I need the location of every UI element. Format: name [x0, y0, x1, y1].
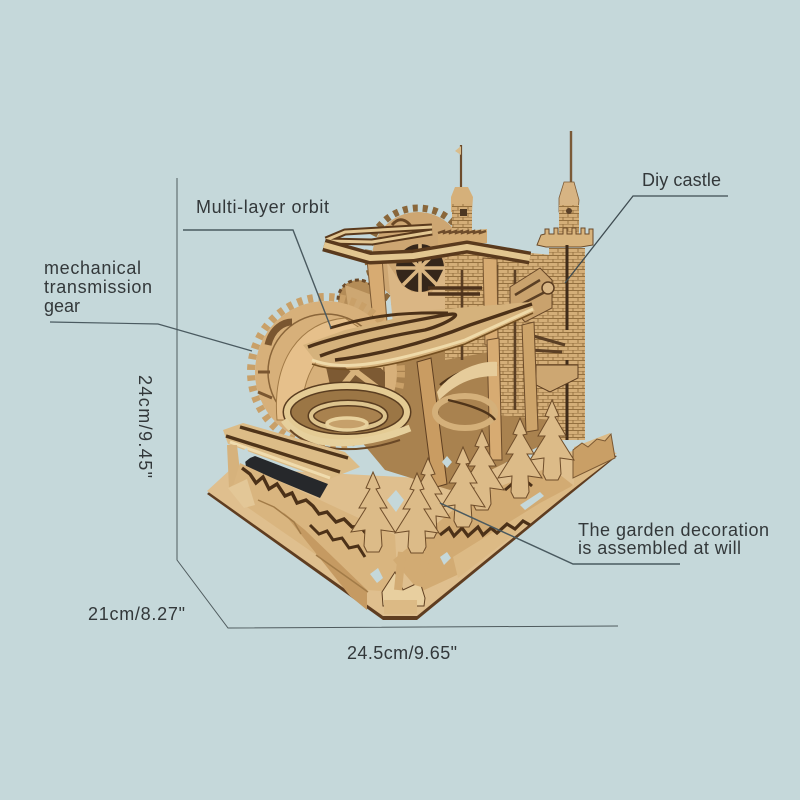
right spiral and arch gear [435, 362, 497, 428]
left fence [228, 463, 398, 610]
spiral track [284, 386, 410, 449]
upper right gear mechanism [510, 268, 554, 322]
label: garden decoration: The garden decoration [578, 520, 769, 540]
dimension line [177, 178, 618, 628]
leader: multi-layer orbit [183, 230, 331, 328]
lower track [223, 423, 360, 488]
battery box [245, 456, 328, 498]
label: mechanical transmission gear: mechanical [44, 258, 141, 278]
leader: garden decoration [440, 503, 680, 564]
central backdrop [360, 300, 552, 490]
left castle tower [438, 145, 487, 246]
label: mechanical transmission gear: transmission [44, 277, 152, 297]
label: width dimension: 24.5cm/9.65" [347, 643, 457, 663]
leader: mechanical transmission gear [50, 322, 252, 351]
wooden marble run castle model [207, 131, 617, 620]
top track [324, 227, 530, 258]
small side gear [338, 280, 378, 320]
middle track [303, 302, 535, 369]
timber pillars [367, 258, 538, 488]
label: garden decoration: is assembled at will [578, 538, 741, 558]
label: multi-layer orbit: Multi-layer orbit [196, 197, 329, 217]
back gear [368, 208, 468, 345]
label: garden decoration [578, 520, 769, 558]
large transmission gear [251, 297, 401, 447]
leader: diy castle [565, 196, 728, 283]
back castle wall [428, 245, 552, 420]
label: height dimension: 24cm/9.45" [135, 375, 155, 478]
gaps showing background [240, 448, 544, 583]
right fence [393, 433, 615, 592]
base board [207, 448, 617, 620]
label: diy castle: Diy castle [642, 170, 721, 190]
right castle tower [530, 131, 593, 440]
label: mechanical transmission gear [44, 258, 152, 316]
pine trees [351, 400, 574, 553]
label: mechanical transmission gear: gear [44, 296, 80, 316]
front corner shrub [382, 552, 428, 614]
label: depth dimension: 21cm/8.27" [88, 604, 185, 624]
